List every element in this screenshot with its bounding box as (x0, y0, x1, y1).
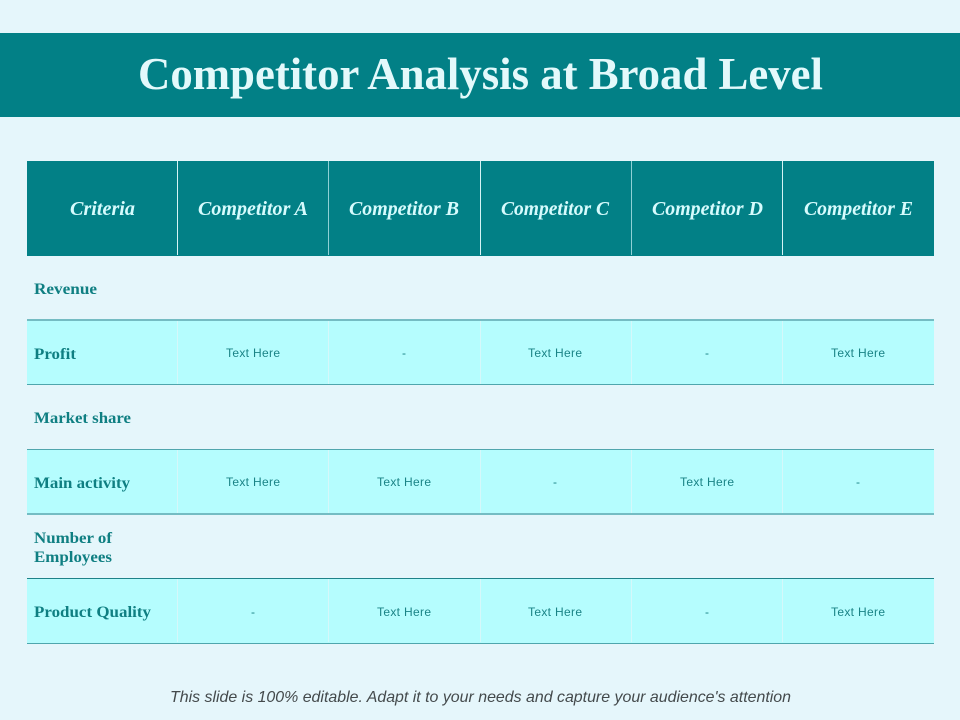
row: Product Quality: Text Here (831, 605, 885, 619)
row: Number of Employees (27, 515, 934, 578)
row: Profit: - (402, 346, 406, 360)
row: Market share: Market share (34, 410, 131, 427)
row: Profit: Text Here (528, 346, 582, 360)
table header row: Competitor C (501, 199, 610, 220)
row: Number of Employees: Employees (34, 549, 112, 566)
table header row (27, 161, 934, 256)
row: Profit: Text Here (831, 346, 885, 360)
row: Profit: Profit (34, 346, 77, 363)
row: Profit: - (705, 346, 709, 360)
row: Product Quality: Text Here (377, 605, 431, 619)
title: Competitor Analysis at Broad Level (138, 49, 823, 99)
table header row: Competitor E (804, 199, 913, 220)
row: Product Quality (27, 578, 934, 644)
row: Number of Employees: Number of (34, 530, 113, 547)
row: Main activity: Text Here (377, 475, 431, 489)
row: Main activity: - (553, 475, 557, 489)
table (27, 161, 934, 644)
row: Main activity: Main activity (34, 475, 130, 492)
row: Product Quality: - (251, 605, 255, 619)
row: Revenue (27, 256, 934, 320)
footer note: This slide is 100% editable. Adapt it to your needs and capture your audience's attention (170, 689, 791, 706)
row: Main activity: Text Here (680, 475, 734, 489)
row: Main activity: Text Here (226, 475, 280, 489)
row: Revenue: Revenue (34, 281, 97, 298)
table header row: Criteria (70, 199, 135, 220)
row: Main activity: - (856, 475, 860, 489)
row: Profit (27, 319, 934, 385)
row: Main activity (27, 449, 934, 515)
row: Product Quality: Text Here (528, 605, 582, 619)
row: Market share (27, 385, 934, 449)
table header row: Competitor B (349, 199, 459, 220)
row: Product Quality: - (705, 605, 709, 619)
table header row: Competitor D (652, 199, 763, 220)
table header row: Competitor A (198, 199, 308, 220)
title banner (0, 33, 960, 117)
row: Product Quality: Product Quality (34, 604, 151, 621)
row: Profit: Text Here (226, 346, 280, 360)
